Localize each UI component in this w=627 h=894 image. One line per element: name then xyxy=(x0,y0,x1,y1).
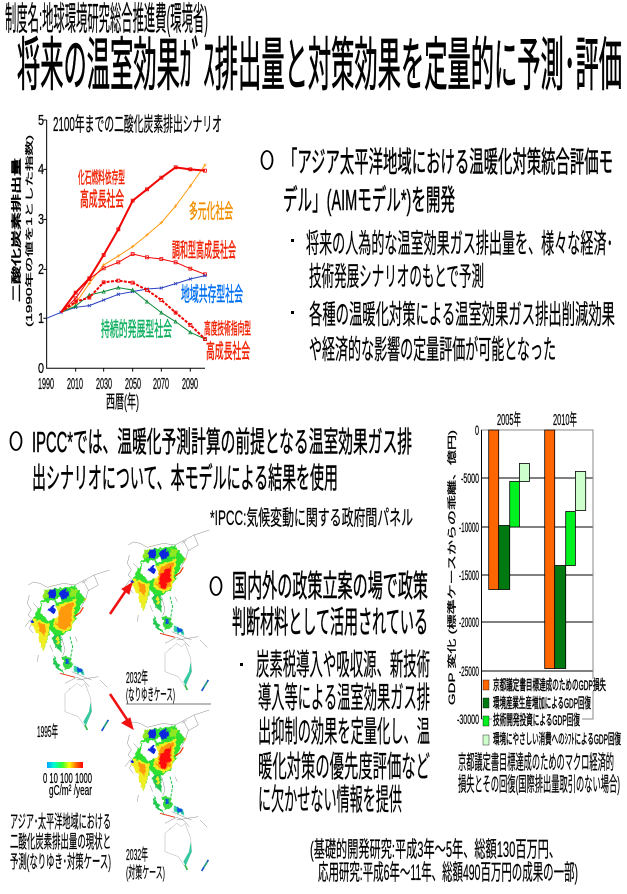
text: 二酸化炭素排出量の現状と xyxy=(10,832,111,852)
year labels: 2005年 xyxy=(497,411,521,429)
axes xyxy=(43,120,205,372)
scenario label: advanced-technology high growth xyxy=(204,320,251,363)
line chart: CO2 emission scenarios to 2100: 持続的発展型社会 xyxy=(101,318,172,341)
line chart: CO2 emission scenarios to 2100: 化石燃料依存型 xyxy=(78,169,125,187)
y-axis ticks: 3 xyxy=(38,211,44,228)
text: 調和型高成長社会 xyxy=(172,239,236,262)
scenario lines xyxy=(47,165,205,339)
text: アジア･太平洋地域における xyxy=(10,812,111,832)
heading circle xyxy=(262,151,272,169)
heading: デル」(AIMモデル*)を開発 xyxy=(283,184,455,217)
arrow: to countermeasure map xyxy=(110,694,133,729)
year labels xyxy=(497,411,577,429)
text block: policy use: 国内外の政策立案の場で政策 xyxy=(232,569,428,604)
line chart: CO2 emission scenarios to 2100: 多元化社会 xyxy=(189,200,233,223)
bar chart: GDP change: 2010年 xyxy=(553,411,577,429)
divider under map xyxy=(126,703,211,705)
x-axis label: 西暦(年) xyxy=(106,392,139,412)
bars: 2005 xyxy=(489,430,529,590)
text: 高度技術指向型 xyxy=(204,320,251,338)
x-axis ticks: 2010 xyxy=(67,376,83,393)
map: 2032 business-as-usual case: (なりゆきケース) xyxy=(126,686,175,704)
map colour legend xyxy=(43,762,92,799)
y-axis label: 二酸化炭素排出量 xyxy=(10,158,23,302)
plot frame and grid xyxy=(481,430,593,719)
map: 2032 business-as-usual case xyxy=(125,530,209,704)
y-axis ticks: -5000 xyxy=(461,470,479,486)
y-axis label: (1990年の値を1とした指数) xyxy=(24,134,34,327)
funding note xyxy=(310,837,578,885)
text: 暖化対策の優先度評価など xyxy=(258,751,430,784)
heading xyxy=(283,146,613,217)
bullet text xyxy=(240,649,430,817)
text block: AIM model development xyxy=(262,146,615,365)
map: 2032 business-as-usual case: 2032年 xyxy=(126,669,148,687)
bar chart: GDP change: -20000 xyxy=(459,614,479,630)
bullet text: に欠かせない情報を提供 xyxy=(258,784,402,817)
bar chart: GDP change: -25000 xyxy=(459,663,479,679)
y-axis ticks: -30000 xyxy=(457,711,479,727)
map: 2032 countermeasure case: 2032年 xyxy=(126,846,148,864)
x-axis ticks: 2070 xyxy=(153,376,169,393)
map colour legend: gC/m² /year xyxy=(49,782,92,799)
heading xyxy=(232,569,428,640)
text block: policy use xyxy=(210,569,430,817)
line chart: CO2 emission scenarios to 2100: 高成長社会 xyxy=(80,188,124,211)
scenario label: fossil-fuel high growth xyxy=(78,169,125,211)
y-axis ticks xyxy=(38,112,44,377)
y-axis ticks xyxy=(457,422,479,727)
y-axis ticks: 2 xyxy=(38,261,44,278)
line chart: CO2 emission scenarios to 2100 xyxy=(10,112,251,412)
bars: 2010 xyxy=(545,430,586,668)
bullet points xyxy=(291,229,615,365)
x-axis ticks: 2050 xyxy=(125,376,141,393)
text: 制度名:地球環境研究総合推進費(環境省) xyxy=(5,0,208,37)
y-axis label xyxy=(10,134,34,327)
y-axis ticks: 0 xyxy=(38,360,44,377)
legend xyxy=(483,677,621,747)
arrow: to business-as-usual map xyxy=(110,583,132,614)
map: 1995 emissions: 1995年 xyxy=(37,723,58,741)
bar chart: GDP change: -15000 xyxy=(459,567,479,583)
text: 高成長社会 xyxy=(206,340,250,363)
x-axis ticks: 1990 xyxy=(38,376,54,393)
map: 1995 emissions xyxy=(25,570,109,741)
bar chart: GDP change xyxy=(446,411,621,747)
map colour legend: 0 10 100 1000 xyxy=(43,770,92,787)
line chart: CO2 emission scenarios to 2100: 2090 xyxy=(182,376,198,393)
line chart: CO2 emission scenarios to 2100: 2100年までの二酸化炭素排出シナリオ xyxy=(53,113,222,136)
map: 2032 countermeasure case xyxy=(125,710,209,882)
heading circle xyxy=(10,432,22,450)
heading circle xyxy=(210,577,222,595)
footnote: *IPCC:気候変動に関する政府間パネル xyxy=(210,507,413,530)
text block: IPCC use xyxy=(10,426,413,530)
x-axis ticks xyxy=(38,376,198,393)
y-axis ticks: 1 xyxy=(38,310,44,327)
heading xyxy=(32,426,412,495)
map caption xyxy=(10,812,111,872)
y-axis ticks: 4 xyxy=(38,161,44,178)
text: 予測(なりゆき･対策ケース) xyxy=(10,852,111,872)
y-axis ticks: 0 xyxy=(475,422,479,438)
y-axis ticks: 5 xyxy=(38,112,44,129)
map: 2032 countermeasure case: (対策ケース) xyxy=(126,864,165,882)
bar chart: GDP change: -10000 xyxy=(459,519,479,535)
x-axis ticks: 2030 xyxy=(96,376,112,393)
bar chart caption xyxy=(458,751,620,796)
y-axis label: GDP 変化 (標準ケースからの乖離、億円) xyxy=(446,430,457,705)
line chart: CO2 emission scenarios to 2100: 地域共存型社会 xyxy=(181,283,243,306)
